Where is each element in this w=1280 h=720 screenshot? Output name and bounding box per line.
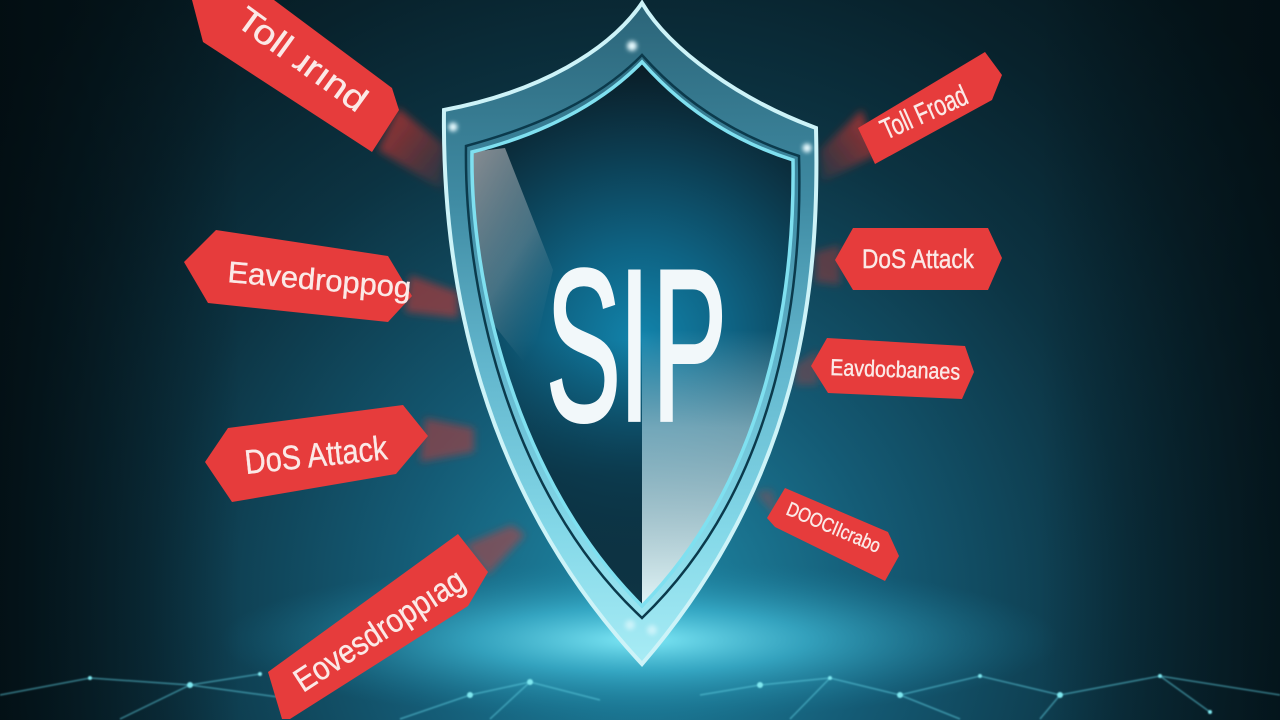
shield: SIP title: SIP <box>546 226 727 466</box>
shield: dark inner groove line <box>466 55 799 618</box>
tag: Eavesdropping bottom left: Eovesdroppıag <box>287 561 471 699</box>
tag: garbled threat right: Eavdocbanaes <box>830 354 961 385</box>
tag: Toll Fraud top right: Toll Froad <box>876 80 973 146</box>
network floor pattern <box>0 672 1280 719</box>
shield: spark lights <box>448 41 812 635</box>
tag: garbled threat lower right: DOOCIIcrabo <box>783 498 884 558</box>
tag: Toll Fraud top right <box>858 52 1002 164</box>
shield: outer frame <box>444 3 816 664</box>
tag: Toll Fraud top left: Toll ɹrınd <box>229 0 375 120</box>
tag: DoS Attack right: DoS Attack <box>862 244 974 274</box>
tag: Eavesdropping left <box>184 230 413 322</box>
tag: DoS Attack left <box>205 405 428 502</box>
shield: face lower shading <box>474 148 775 604</box>
tag: Eavesdropping left: Eavedroppog <box>226 256 413 305</box>
shield: glass reflection <box>474 148 553 351</box>
tag: garbled threat right <box>811 338 974 399</box>
tag: DoS Attack left: DoS Attack <box>243 429 390 482</box>
shield <box>444 3 816 664</box>
tag: DoS Attack right <box>835 228 1002 290</box>
shield: central face <box>472 62 793 606</box>
tag: Toll Fraud top left <box>192 0 399 152</box>
shield: inner outline <box>472 62 793 606</box>
attack beams <box>378 108 875 575</box>
tag: garbled threat lower right <box>767 488 899 581</box>
